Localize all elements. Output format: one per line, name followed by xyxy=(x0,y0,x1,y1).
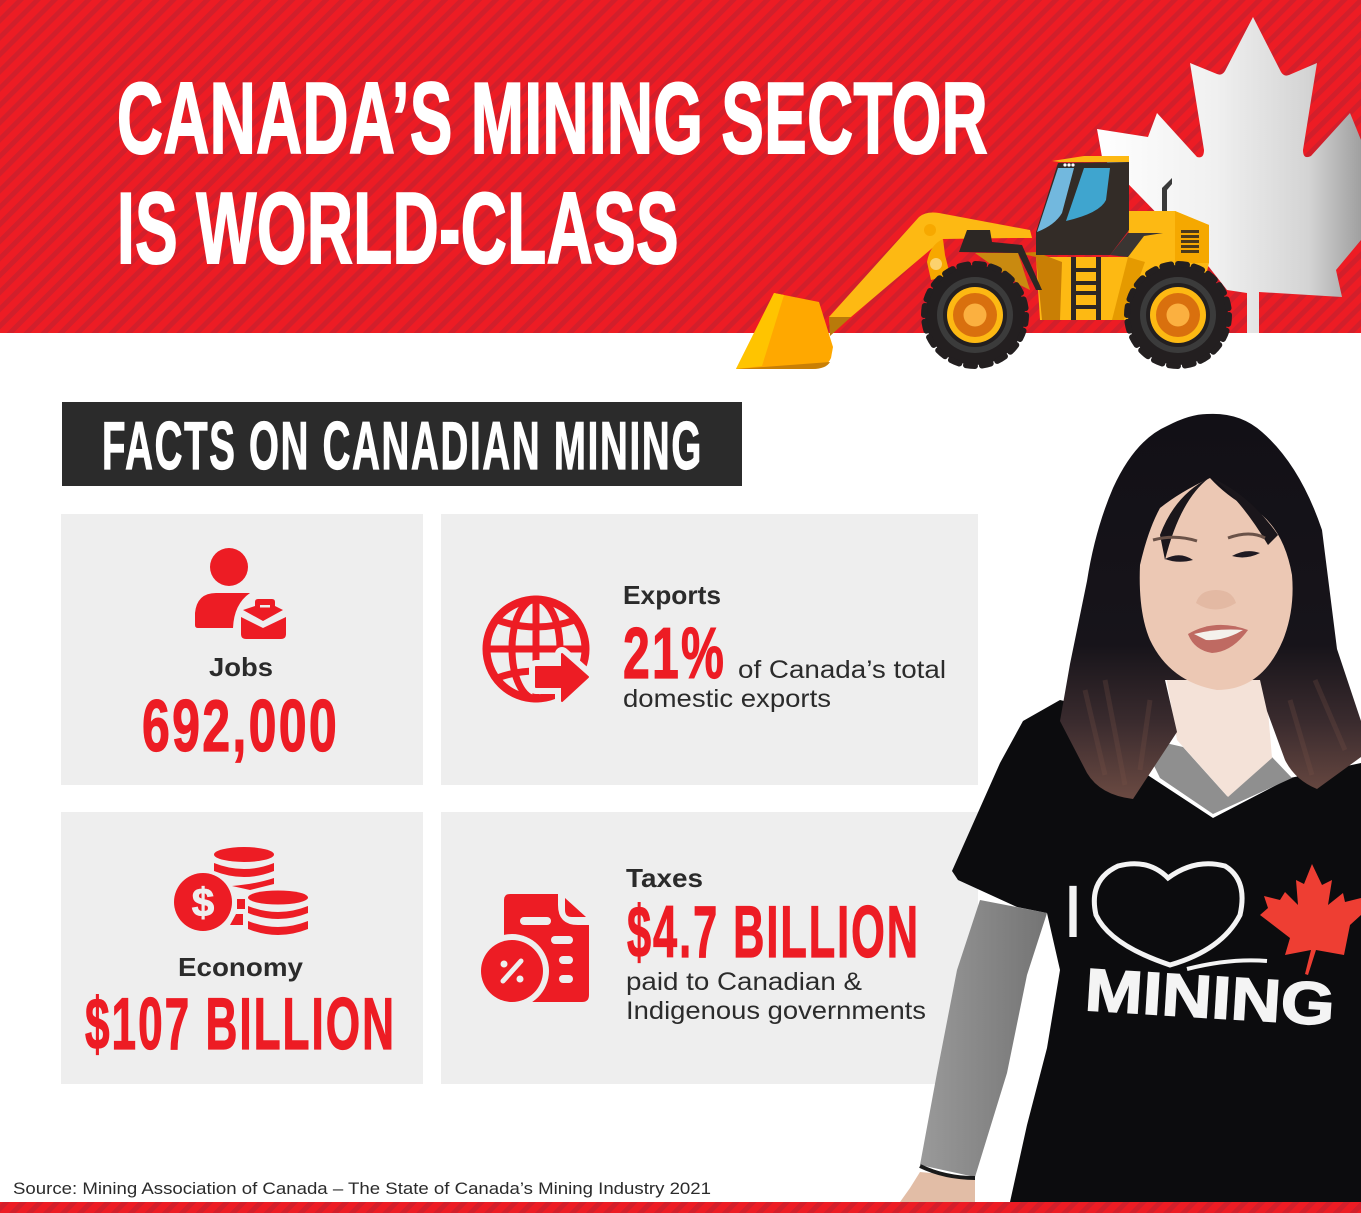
shirt heart xyxy=(1094,864,1242,965)
undershirt collar xyxy=(1140,737,1292,814)
section heading xyxy=(62,402,742,486)
shirt word mining: MINING xyxy=(1083,956,1337,1038)
exhaust xyxy=(1162,178,1172,211)
panel: exports xyxy=(441,514,978,785)
value: exports: 21% xyxy=(623,614,726,694)
description: taxes xyxy=(626,968,926,1025)
panel: economy xyxy=(61,812,423,1084)
description: taxes: paid to Canadian & xyxy=(626,968,862,996)
linkage xyxy=(959,230,1042,290)
nose xyxy=(1196,590,1236,610)
icon: maple leaf xyxy=(1097,17,1361,333)
label: jobs: Jobs xyxy=(209,652,273,682)
source note: Source: Mining Association of Canada – The State of Canada’s Mining Industry 2021 xyxy=(13,1179,711,1198)
mouth xyxy=(1188,625,1248,653)
pickaxe line xyxy=(1187,960,1267,969)
bucket xyxy=(736,293,833,369)
bangs xyxy=(1160,478,1278,560)
description: exports xyxy=(623,656,946,713)
label: exports: Exports xyxy=(623,580,721,610)
header banner xyxy=(0,0,1361,333)
value: jobs: 692,000 xyxy=(142,686,339,767)
description: exports: domestic exports xyxy=(623,685,831,713)
description: exports: of Canada’s total xyxy=(738,656,946,684)
icon: tax document xyxy=(475,894,589,1008)
hair highlights xyxy=(1085,680,1345,785)
shirt xyxy=(952,700,1361,1202)
wheel left xyxy=(924,264,1026,366)
ladder xyxy=(1071,257,1101,320)
sleeve xyxy=(920,900,1047,1177)
section heading: FACTS ON CANADIAN MINING xyxy=(102,408,703,484)
eyes xyxy=(1165,551,1260,562)
hand xyxy=(900,1172,975,1202)
face xyxy=(1140,478,1293,690)
value: taxes: $4.7 BILLION xyxy=(627,892,920,973)
title xyxy=(117,63,988,285)
body xyxy=(1036,211,1209,320)
shirt print xyxy=(1066,864,1361,1038)
label: taxes: Taxes xyxy=(626,863,703,893)
panel: taxes xyxy=(441,812,978,1084)
icon: globe with arrow xyxy=(486,599,588,701)
icon: person with briefcase xyxy=(195,548,286,639)
loader arm xyxy=(829,212,1032,333)
hair xyxy=(1060,414,1361,799)
value: economy: $107 BILLION xyxy=(85,984,396,1065)
label: economy: Economy xyxy=(178,952,304,982)
cab xyxy=(1036,162,1129,255)
description: taxes: Indigenous governments xyxy=(626,997,926,1025)
wheel right xyxy=(1127,264,1229,366)
icon: coin stacks: $ xyxy=(192,881,214,925)
title: IS WORLD-CLASS xyxy=(117,173,679,285)
icon: yellow wheel loader xyxy=(736,156,1229,369)
neck xyxy=(1165,670,1272,797)
shirt maple leaf xyxy=(1260,864,1361,975)
panel: jobs xyxy=(61,514,423,785)
eyebrows xyxy=(1153,534,1265,541)
shirt letter I: I xyxy=(1066,870,1080,953)
photo: woman in mining t-shirt xyxy=(900,414,1361,1202)
grille xyxy=(1181,230,1199,253)
fender xyxy=(1110,233,1163,257)
icon: coin stacks xyxy=(174,847,308,935)
bottom stripe xyxy=(0,1202,1361,1213)
